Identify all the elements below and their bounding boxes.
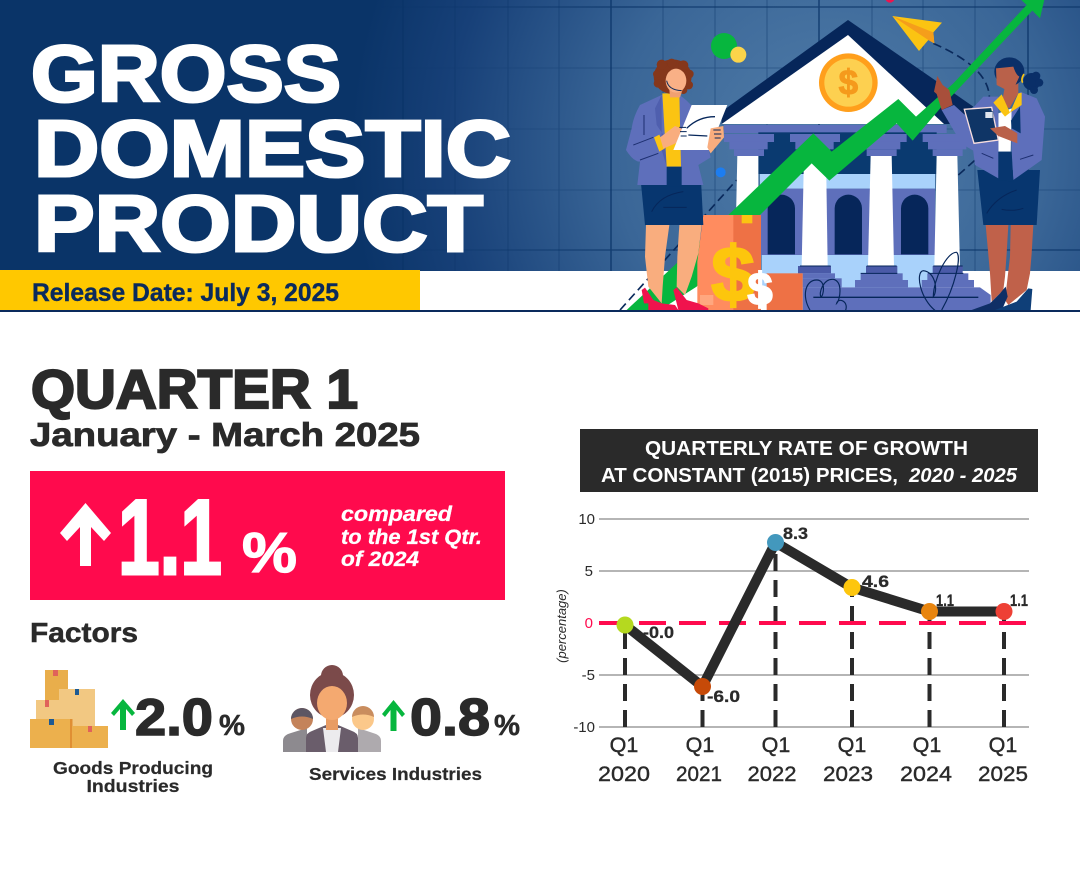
chart title: AT CONSTANT (2015) PRICES, xyxy=(601,465,898,487)
data point markers xyxy=(616,534,1012,695)
lower illustration details xyxy=(0,29,1045,318)
y axis labels: -5 xyxy=(582,667,595,684)
x axis labels: 2023 xyxy=(823,762,873,786)
x axis labels: Q1 xyxy=(913,733,941,757)
decorative squiggles xyxy=(805,252,958,312)
comparison note: compared xyxy=(341,503,453,526)
horizontal gridlines xyxy=(599,519,1029,727)
data value labels: 1.1 xyxy=(1010,591,1028,610)
heading: factors: Factors xyxy=(30,617,138,648)
woman with paper: torso and head xyxy=(626,59,727,187)
main title xyxy=(32,44,511,254)
data value labels xyxy=(643,524,1028,706)
release date bar: Release Date: July 3, 2025 xyxy=(32,279,339,307)
factor: services industries xyxy=(283,665,520,784)
shipping boxes with dollar signs: $ xyxy=(711,230,755,318)
goods label xyxy=(53,758,213,796)
header banner xyxy=(0,0,1080,310)
data value labels: -0.0 xyxy=(643,623,674,642)
y axis labels: 10 xyxy=(578,511,595,528)
x axis labels: Q1 xyxy=(610,733,638,757)
factor: goods producing industries xyxy=(30,670,245,796)
release date bar xyxy=(0,270,420,310)
green growth arrow xyxy=(627,0,1045,310)
x axis labels: Q1 xyxy=(989,733,1017,757)
percent sign: % xyxy=(242,521,297,585)
data value labels: 1.1 xyxy=(936,591,954,610)
shipping boxes with dollar signs: $ xyxy=(747,264,773,315)
data value labels: 8.3 xyxy=(783,524,808,543)
shipping boxes with dollar signs xyxy=(697,215,803,318)
icon: green up arrow xyxy=(111,699,135,730)
x axis labels: 2020 xyxy=(598,762,650,786)
icon: green up arrow xyxy=(382,700,405,731)
x axis labels: 2022 xyxy=(748,762,796,786)
goods label: Industries xyxy=(86,776,180,796)
x axis labels xyxy=(598,733,1028,786)
icon: up arrow xyxy=(60,503,111,566)
chart title: 2020 - 2025 xyxy=(908,465,1018,487)
y axis labels: -10 xyxy=(573,719,595,736)
x axis labels: Q1 xyxy=(838,733,866,757)
subheading: period: January - March 2025 xyxy=(30,416,420,453)
x axis labels: Q1 xyxy=(686,733,714,757)
y axis labels xyxy=(573,511,595,736)
services percent sign: % xyxy=(494,710,520,742)
main title: PRODUCT xyxy=(34,179,483,268)
x axis labels: 2025 xyxy=(978,762,1028,786)
woman with tablet: legs and skirt xyxy=(972,170,1040,310)
growth value: 1.1 xyxy=(118,477,222,597)
callout: headline growth xyxy=(30,471,505,600)
zero reference line xyxy=(599,621,1029,625)
bank building xyxy=(722,20,991,310)
icon: dollar coin xyxy=(819,53,878,112)
chart title xyxy=(580,429,1038,492)
woman with paper: legs and skirt xyxy=(641,180,708,310)
data value labels: 4.6 xyxy=(862,572,889,591)
year drop lines xyxy=(625,550,1004,727)
main title: GROSS xyxy=(31,29,341,118)
y axis labels: 0 xyxy=(585,615,593,632)
header bottom rule xyxy=(0,310,1080,312)
x axis labels: Q1 xyxy=(762,733,790,757)
comparison note: of 2024 xyxy=(341,548,419,571)
y axis labels: 5 xyxy=(585,563,593,580)
services label: Services Industries xyxy=(309,764,482,784)
x axis labels: 2024 xyxy=(900,762,952,786)
y axis title: (percentage) xyxy=(554,589,569,663)
data value labels: -6.0 xyxy=(707,687,740,706)
icon: group of people xyxy=(283,665,381,752)
services value: 0.8 xyxy=(410,689,490,747)
goods value: 2.0 xyxy=(135,689,213,747)
comparison note xyxy=(341,503,482,571)
icon: decorative dots xyxy=(711,0,895,177)
icon: paper plane xyxy=(892,16,942,51)
dashed flight path xyxy=(620,43,989,310)
goods label: Goods Producing xyxy=(53,758,213,778)
goods percent sign: % xyxy=(219,710,245,742)
woman with tablet: torso and head xyxy=(934,57,1045,182)
main title: DOMESTIC xyxy=(34,104,511,193)
growth line xyxy=(625,542,1004,686)
icon: dollar coin: $ xyxy=(839,64,858,103)
x axis labels: 2021 xyxy=(676,762,722,786)
header illustration xyxy=(620,0,1045,310)
icon: cardboard boxes xyxy=(30,670,108,748)
chart title: QUARTERLY RATE OF GROWTH xyxy=(645,438,968,460)
line chart: quarterly growth rate xyxy=(554,511,1029,786)
heading: quarter 1: QUARTER 1 xyxy=(31,358,358,420)
comparison note: to the 1st Qtr. xyxy=(341,526,482,549)
